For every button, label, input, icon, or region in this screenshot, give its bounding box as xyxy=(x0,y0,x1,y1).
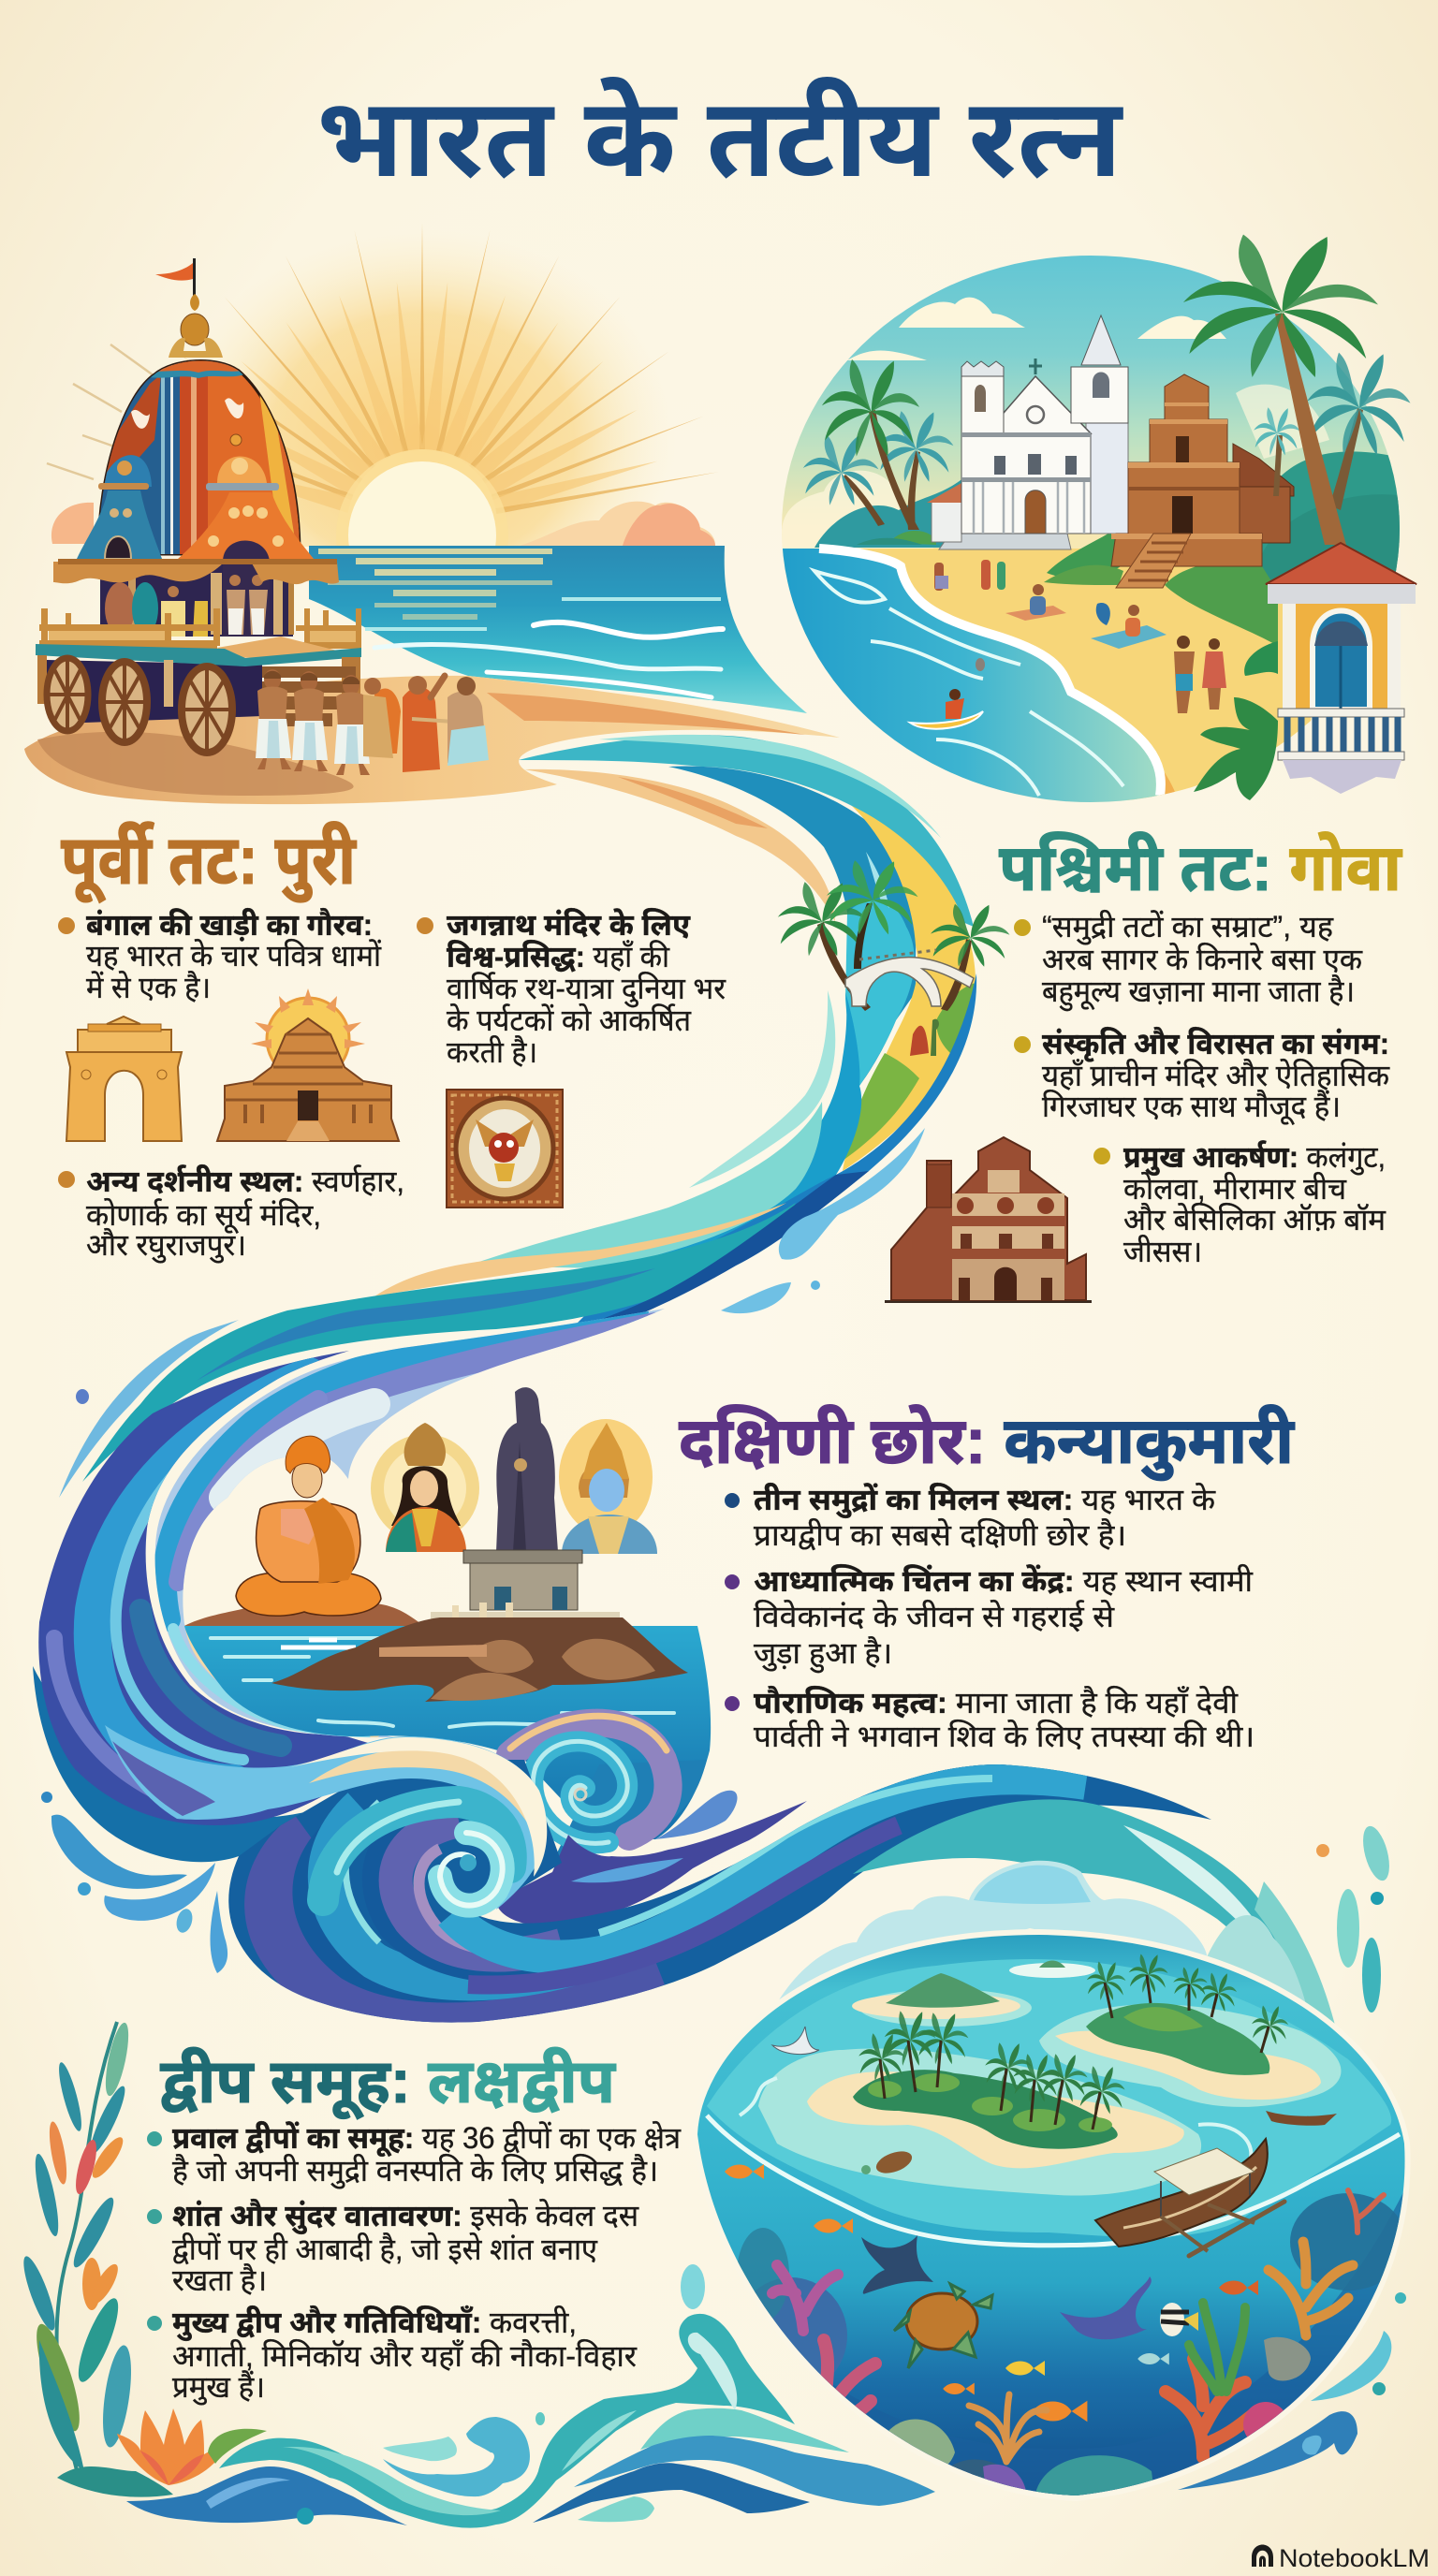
text block: Kanyakumari bullet 1: तीन समुद्रों का मिलन स्थल: यह भारत के xyxy=(754,1483,1216,1518)
text block: Lakshadweep bullet 3: अगाती, मिनिकॉय और यहाँ की नौका-विहार xyxy=(172,2338,638,2373)
panel: Puri scene illustration xyxy=(24,223,840,804)
inner light band xyxy=(155,1309,665,1737)
shallow lagoon xyxy=(707,1959,1391,2237)
text block: Puri bullet 1 xyxy=(58,908,382,1004)
clouds at horizon xyxy=(51,502,715,546)
heading: South tip Kanyakumari: दक्षिणी छोर: कन्याकुमारी xyxy=(679,1404,1295,1482)
right corner wave xyxy=(1178,2411,1357,2490)
text block: Kanyakumari bullet 2: आध्यात्मिक चिंतन का केंद्र: यह स्थान स्वामी xyxy=(754,1564,1254,1598)
island top-right xyxy=(1055,2031,1321,2100)
clouds xyxy=(782,298,1329,552)
text block: Goa bullet 2: संस्कृति और विरासत का संगम: xyxy=(1042,1027,1389,1062)
text block: Kanyakumari bullet 1: प्रायद्वीप का सबसे दक्षिणी छोर है। xyxy=(754,1518,1126,1552)
bed of corals xyxy=(825,2192,1403,2496)
beach people xyxy=(934,560,1226,713)
text block: Puri bullet 2: करती है। xyxy=(447,1035,537,1069)
bottom wave border xyxy=(126,2264,1406,2528)
text block: Goa bullet 1 xyxy=(1014,910,1363,1012)
teal wave xyxy=(519,735,974,927)
church of Bom Jesus icon xyxy=(885,1137,1092,1303)
pedestal xyxy=(431,1550,620,1636)
sea xyxy=(184,1626,711,1839)
manta ray dark xyxy=(861,2235,933,2294)
portico bars xyxy=(98,483,149,490)
river island vignette: palms and bridge xyxy=(778,860,1009,1056)
text block: Goa bullet 3 xyxy=(1093,1140,1387,1268)
church xyxy=(927,315,1128,549)
text block: Puri bullet 2: के पर्यटकों को आकर्षित xyxy=(447,1003,692,1037)
swirl A xyxy=(510,1716,707,1863)
text block: Puri bullet 1: बंगाल की खाड़ी का गौरव: xyxy=(86,908,373,942)
text block: Kanyakumari bullet 3 xyxy=(725,1685,1255,1753)
text block: Goa bullet 2: गिरजाघर एक साथ मौजूद हैं। xyxy=(1042,1090,1341,1125)
teal lower band xyxy=(82,1203,796,1482)
river: upper flow xyxy=(59,735,976,1498)
text block: Lakshadweep bullet 1: प्रवाल द्वीपों का समूह: यह 36 द्वीपों का एक क्षेत्र xyxy=(172,2121,682,2157)
swirl B body and tail xyxy=(228,1760,1211,2023)
blue wave left xyxy=(126,2466,407,2525)
orange flowers xyxy=(46,2120,127,2310)
palms xyxy=(803,234,1410,545)
sunrise with rays xyxy=(47,227,717,547)
tree line xyxy=(814,477,964,548)
island top-left xyxy=(886,1973,1000,2008)
kayak xyxy=(910,689,983,729)
text block: Lakshadweep bullet 3: प्रमुख हैं। xyxy=(172,2370,265,2406)
indigo band xyxy=(38,1351,393,1825)
text block: Puri bullet 2: विश्व-प्रसिद्ध: यहाँ की xyxy=(447,939,670,973)
sea xyxy=(309,546,807,713)
light blue streak xyxy=(59,1320,239,1498)
river: big left wave and swirls xyxy=(33,1309,1348,2097)
outer blue xyxy=(562,973,976,1339)
big island xyxy=(807,2071,1184,2168)
swirl B crescent xyxy=(323,1802,511,1906)
text block: Goa bullet 1: अरब सागर के किनारे बसा एक xyxy=(1042,943,1363,976)
yellow sand xyxy=(843,806,976,1171)
text block: Puri bullet 1: में से एक है। xyxy=(86,971,211,1004)
text block: Puri bullet 2 xyxy=(417,908,726,1069)
panel: Kanyakumari figures xyxy=(184,1387,688,1702)
text block: Kanyakumari bullet 2: विवेकानंद के जीवन से गहराई से xyxy=(754,1600,1115,1633)
text block: Kanyakumari bullet 2: जुड़ा हुआ है। xyxy=(754,1636,892,1674)
corals xyxy=(772,2190,1384,2462)
sand stripe xyxy=(374,1203,786,1296)
small island sand xyxy=(852,1993,1020,2019)
purple tail xyxy=(496,1801,807,1925)
text block: Lakshadweep bullet 3 xyxy=(147,2305,638,2406)
icon: Jagannath wooden panel xyxy=(447,1090,563,1208)
chariot deck and body xyxy=(217,637,337,660)
heading: East coast Puri: पूर्वी तट: पुरी xyxy=(61,821,357,903)
text block: Goa bullet 1: बहुमूल्य खज़ाना माना जाता है। xyxy=(1042,974,1355,1012)
blue band xyxy=(668,767,916,1086)
icon: sun temple xyxy=(217,988,399,1141)
text block: Puri bullet 3 xyxy=(58,1164,404,1264)
text block: Goa bullet 2: यहाँ प्राचीन मंदिर और ऐतिहासिक xyxy=(1042,1058,1390,1092)
bridge xyxy=(845,958,974,1006)
blue portico xyxy=(77,490,162,559)
heading: West coast Goa: पश्चिमी तट: गोवा xyxy=(999,831,1402,904)
little fish xyxy=(725,2164,1258,2422)
island palms xyxy=(858,1954,1288,2130)
deep water ripple xyxy=(739,2076,1253,2157)
text block: Kanyakumari bullet 3: पार्वती ने भगवान शिव के लिए तपस्या की थी। xyxy=(754,1720,1255,1753)
text block: Kanyakumari bullet 1 xyxy=(725,1483,1216,1552)
temple xyxy=(1111,374,1294,588)
small turtle xyxy=(861,2151,912,2174)
text block: Lakshadweep bullet 3: मुख्य द्वीप और गतिविधियाँ: कवरत्ती, xyxy=(172,2305,577,2341)
text block: Goa bullet 2 xyxy=(1014,1027,1390,1125)
text block: Lakshadweep bullet 1 xyxy=(147,2121,682,2189)
dome xyxy=(94,356,309,557)
text block: Lakshadweep bullet 2: शांत और सुंदर वातावरण: इसके केवल दस xyxy=(172,2199,639,2234)
teal right arc xyxy=(853,1799,1321,2050)
text block: Lakshadweep bullet 2 xyxy=(147,2199,639,2297)
pale teal streaks xyxy=(689,990,835,1188)
rock island xyxy=(271,1617,688,1702)
walkers xyxy=(910,1019,939,1056)
balcony house xyxy=(1266,543,1416,794)
angelfish xyxy=(1160,2303,1198,2336)
outrigger boat xyxy=(1095,2139,1284,2256)
clouds xyxy=(777,1861,1208,2003)
text block: Kanyakumari bullet 2 xyxy=(725,1564,1254,1674)
right wave stack xyxy=(640,2408,849,2452)
sandy beach xyxy=(24,676,840,804)
steps xyxy=(262,666,356,726)
text block: Puri bullet 2: वार्षिक रथ-यात्रा दुनिया भर xyxy=(447,972,726,1008)
title: भारत के तटीय रत्न xyxy=(316,76,1123,200)
sea xyxy=(783,549,1159,802)
cabin xyxy=(100,562,293,637)
railing left xyxy=(39,608,220,649)
S-curve band xyxy=(105,1725,547,1910)
curl wave and teal band xyxy=(219,2314,795,2528)
Puri small icons xyxy=(66,988,563,1208)
text block: Goa bullet 1: “समुद्री तटों का सम्राट”, यह xyxy=(1042,910,1334,945)
text block: Goa bullet 3: कोलवा, मीरामार बीच xyxy=(1123,1172,1347,1206)
icon: gateway monument xyxy=(66,1017,182,1141)
lotus flower xyxy=(117,2408,267,2485)
blue deity xyxy=(559,1419,657,1554)
panel: Puri chariot xyxy=(36,258,489,775)
text block: Lakshadweep bullet 2: द्वीपों पर ही आबादी है, जो इसे शांत बनाए xyxy=(172,2232,598,2266)
panel: Goa scene circle xyxy=(768,234,1416,824)
men pulling rope xyxy=(256,669,489,775)
statue xyxy=(496,1387,558,1552)
base leaf xyxy=(57,2466,173,2497)
wheels xyxy=(47,658,232,753)
text block: Goa bullet 3: जीसस। xyxy=(1123,1235,1202,1268)
distant boat xyxy=(1266,2111,1337,2126)
text block: Puri bullet 3: और रघुराजपुर। xyxy=(86,1228,246,1264)
text block: Lakshadweep bullet 1: है जो अपनी समुद्री वनस्पति के लिए प्रसिद्ध है। xyxy=(172,2154,658,2189)
chariot flag xyxy=(155,258,223,358)
beach sand xyxy=(859,549,1311,800)
stingray xyxy=(1060,2276,1152,2339)
seabird xyxy=(772,2027,819,2055)
dark tail xyxy=(440,1171,869,1388)
goddess xyxy=(371,1423,479,1552)
text block: Lakshadweep bullet 2: रखता है। xyxy=(172,2263,267,2297)
NotebookLM logo: NotebookLM xyxy=(1279,2544,1430,2572)
outer sliver xyxy=(33,1666,346,1862)
curl xyxy=(383,2417,530,2496)
canopy fringe xyxy=(53,562,339,584)
riders xyxy=(105,575,268,637)
text block: Puri bullet 3: कोणार्क का सूर्य मंदिर, xyxy=(86,1198,321,1234)
palm frond foreground xyxy=(1194,697,1278,800)
railing right xyxy=(296,608,361,649)
orange portico xyxy=(178,492,314,559)
left plant border xyxy=(18,2021,267,2497)
heading: Islands Lakshadweep: द्वीप समूह: लक्षद्वीप xyxy=(160,2046,616,2120)
panel: Lakshadweep circle xyxy=(697,1861,1406,2527)
splash drops around the waves xyxy=(41,1128,1394,2012)
text block: Puri bullet 1: यह भारत के चार पवित्र धामों xyxy=(86,939,382,973)
text block: Puri bullet 3: अन्य दर्शनीय स्थल: स्वर्णहार, xyxy=(86,1164,404,1198)
green shrubs xyxy=(1047,534,1120,576)
text block: Puri bullet 2: जगन्नाथ मंदिर के लिए xyxy=(447,908,691,942)
text block: Goa bullet 3: प्रमुख आकर्षण: कलंगुट, xyxy=(1123,1140,1386,1176)
text block: Goa bullet 3: और बेसिलिका ऑफ़ बॉम xyxy=(1123,1203,1387,1237)
turtle xyxy=(894,2284,992,2368)
faint rays behind chariot xyxy=(47,344,157,479)
text block: Kanyakumari bullet 3: पौराणिक महत्व: माना जाता है कि यहाँ देवी xyxy=(754,1685,1239,1720)
Vivekananda xyxy=(184,1436,424,1626)
sand streak xyxy=(524,769,835,922)
